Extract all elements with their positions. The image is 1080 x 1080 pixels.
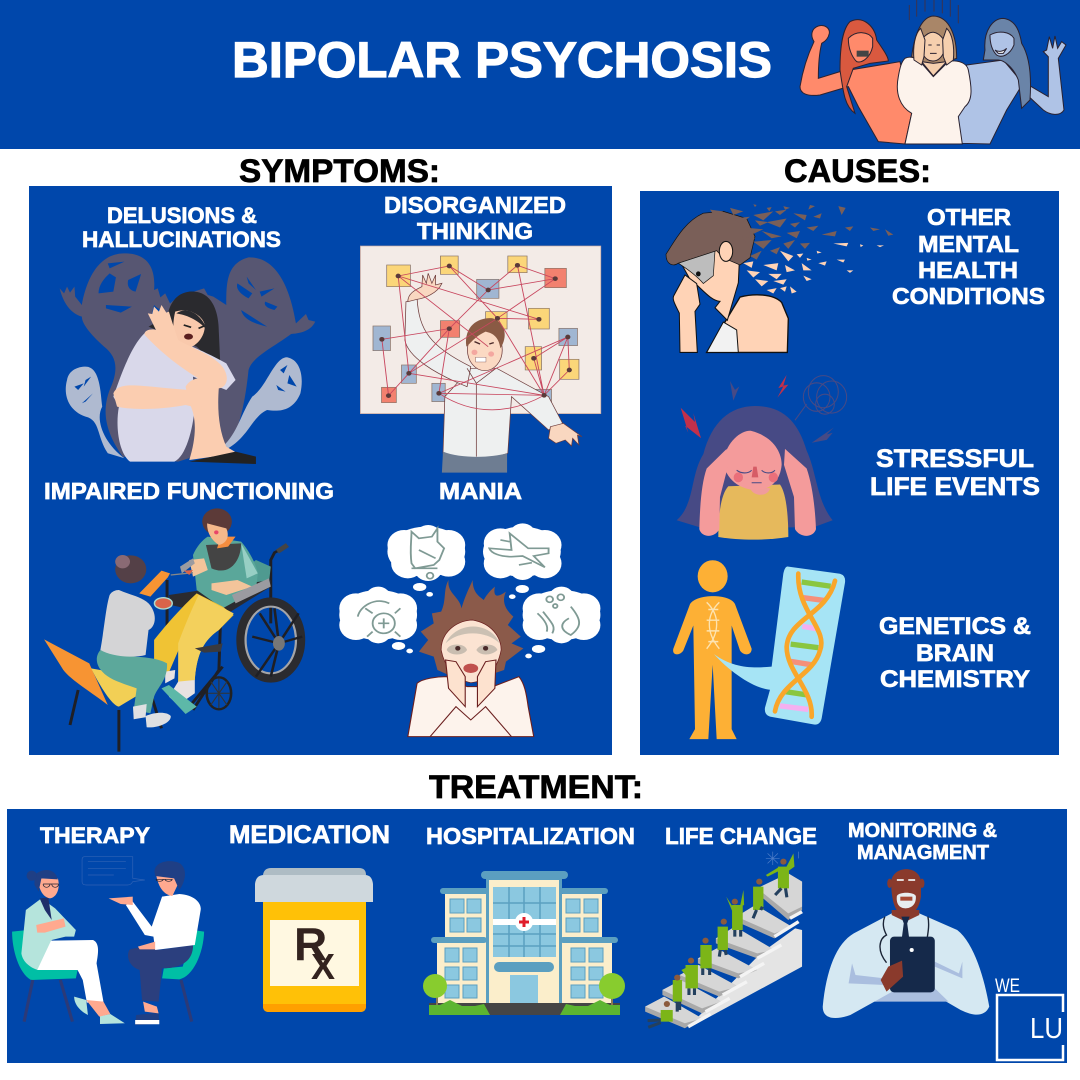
illustration: climbing stairs	[645, 852, 802, 1028]
illustration: man tangled in thought board	[360, 246, 601, 473]
label: therapy: THERAPY	[40, 823, 150, 848]
label: disorganized thinking: DISORGANIZED	[384, 192, 566, 218]
icon: three moods figures	[800, 0, 1066, 144]
label: stressful life events	[870, 445, 1040, 501]
illustration: body with DNA callout	[673, 560, 845, 739]
label: genetics and brain chemistry: CHEMISTRY	[880, 666, 1030, 693]
illustration: woman haunted by ghosts	[60, 253, 315, 464]
title: BIPOLAR PSYCHOSIS	[232, 32, 772, 88]
illustration: doctor with tablet	[823, 869, 989, 1018]
label: monitoring and management: MONITORING &	[848, 820, 997, 842]
label: other mental health conditions: HEALTH	[918, 257, 1018, 283]
label: other mental health conditions: OTHER	[927, 204, 1011, 230]
label: disorganized thinking: THINKING	[417, 218, 533, 244]
label: life change: LIFE CHANGE	[665, 823, 817, 849]
label: delusions and hallucinations: DELUSIONS &	[107, 203, 257, 228]
label: medication: MEDICATION	[229, 821, 390, 849]
illustration: hospital building	[423, 871, 625, 1015]
label: other mental health conditions: MENTAL	[918, 231, 1019, 257]
label: monitoring and management	[848, 820, 997, 864]
heading: symptoms: SYMPTOMS:	[239, 153, 440, 189]
label: hospitalization: HOSPITALIZATION	[426, 823, 635, 849]
label: delusions and hallucinations	[82, 203, 281, 252]
illustration: prescription bottle: R	[294, 918, 327, 970]
illustration: woman dissolving into fragments	[666, 204, 893, 352]
label: impaired functioning: IMPAIRED FUNCTIONING	[44, 478, 334, 504]
label: other mental health conditions: CONDITIONS	[892, 283, 1045, 309]
label: stressful life events: LIFE EVENTS	[870, 473, 1040, 501]
illustration: prescription bottle: X	[311, 946, 335, 987]
heading: treatment: TREATMENT:	[429, 769, 643, 805]
panel: causes	[640, 191, 1059, 755]
label: monitoring and management: MANAGMENT	[857, 842, 989, 864]
logo: We Level Up: LU	[1030, 1013, 1063, 1045]
logo: We Level Up	[995, 976, 1063, 1060]
label: genetics and brain chemistry: GENETICS &	[879, 613, 1031, 640]
logo: We Level Up: WE	[995, 976, 1020, 997]
label: other mental health conditions	[892, 204, 1045, 309]
illustration: prescription bottle	[255, 868, 373, 1012]
illustration: frightened woman with thought clouds	[339, 523, 600, 737]
label: genetics and brain chemistry: BRAIN	[916, 640, 994, 667]
heading: causes: CAUSES:	[784, 153, 931, 189]
panel: symptoms	[29, 186, 612, 755]
panel: treatment	[7, 809, 1067, 1063]
label: disorganized thinking	[384, 192, 566, 244]
label: stressful life events: STRESSFUL	[876, 445, 1034, 473]
header banner	[0, 0, 1080, 149]
illustration: caregiver feeding person in wheelchair	[44, 508, 302, 752]
illustration: therapist and patient	[12, 857, 204, 1025]
illustration: stressed woman holding head	[677, 375, 847, 540]
label: mania: MANIA	[439, 478, 522, 504]
label: genetics and brain chemistry	[879, 613, 1031, 693]
label: delusions and hallucinations: HALLUCINATIONS	[82, 227, 281, 252]
